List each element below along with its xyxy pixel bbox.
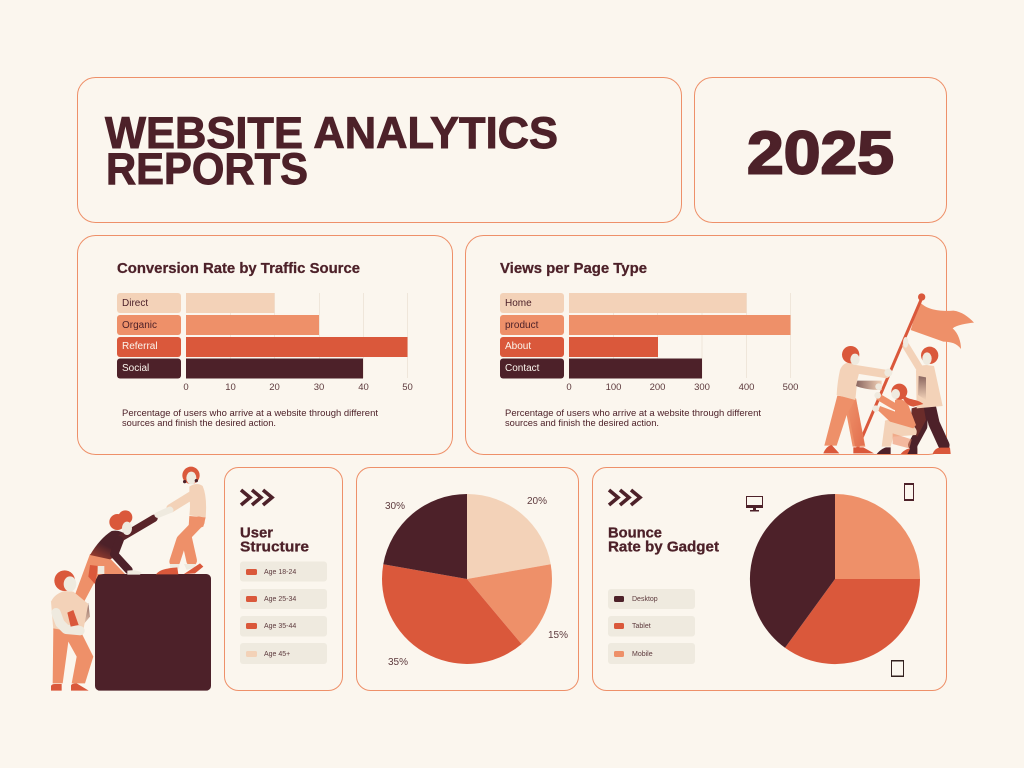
heading: bounce rate by gadget: Bounce [608, 524, 662, 542]
legend: gadgets: Mobile [632, 651, 653, 658]
legend: age groups: Age 35-44 [264, 623, 296, 630]
description: conversion rate: sources and finish the desired action. [122, 418, 276, 429]
bar chart: conversion rate: Organic [122, 320, 157, 331]
description: views per page: sources and finish the desired action. [505, 418, 659, 429]
bar chart: conversion rate: 30 [314, 382, 324, 393]
legend: age groups: Age 18-24 [264, 569, 296, 576]
panel: bounce rate by gadget [592, 468, 946, 690]
heading: user structure: User [240, 524, 273, 542]
bar chart: views per page: Contact [505, 363, 540, 374]
pie labels [385, 496, 568, 668]
bar chart: conversion rate [117, 293, 413, 393]
icon: mobile [904, 483, 914, 501]
icon: desktop [746, 496, 763, 512]
bar chart: views per page: product [505, 320, 539, 331]
bar chart: conversion rate: 0 [183, 382, 189, 393]
pie chart: age share [382, 494, 552, 664]
panel: title [78, 78, 682, 222]
legend: age groups: Age 45+ [264, 651, 290, 658]
bar chart: views per page: 100 [606, 382, 621, 393]
icon: tablet [891, 660, 904, 677]
bar chart: conversion rate: 50 [402, 382, 413, 393]
description: views per page: Percentage of users who arrive at a website through different [505, 408, 761, 419]
bar chart: views per page: 400 [739, 382, 754, 393]
heading: bounce rate by gadget [608, 524, 719, 556]
description: conversion rate: Percentage of users who arrive at a website through different [122, 408, 378, 419]
icon: chevrons [241, 490, 272, 505]
illustration: team raising a flag [823, 293, 974, 454]
legend: gadgets [608, 589, 695, 664]
panel: views per page type [466, 236, 946, 454]
bar chart: conversion rate: Social [122, 363, 149, 374]
legend: age groups [240, 562, 327, 664]
bar chart: views per page: 300 [694, 382, 710, 393]
heading: bounce rate by gadget: Rate by Gadget [608, 538, 719, 556]
illustration: team climbing a block [51, 467, 211, 691]
bar chart: conversion rate: Direct [122, 298, 148, 309]
heading: website analytics reports [105, 109, 558, 194]
bar chart: conversion rate: 10 [225, 382, 236, 393]
heading: views per page type: Views per Page Type [500, 261, 647, 277]
bar chart: views per page: About [505, 341, 531, 352]
description: conversion rate [122, 408, 378, 429]
icon: chevrons [609, 490, 640, 505]
bar chart: views per page: 0 [566, 382, 572, 393]
year 2025: 2025 [747, 120, 894, 186]
bar chart: conversion rate: 20 [269, 382, 280, 393]
pie chart: bounce rate [750, 494, 920, 664]
heading: website analytics reports: REPORTS [106, 145, 308, 194]
heading: user structure [240, 524, 309, 556]
description: views per page [505, 408, 761, 429]
bar chart: conversion rate: Referral [122, 341, 158, 352]
legend: age groups: Age 25-34 [264, 596, 296, 603]
heading: website analytics reports: WEBSITE ANALYTICS [105, 109, 558, 158]
pie labels: 30% [385, 501, 405, 512]
bar chart: views per page [500, 293, 798, 393]
bar chart: conversion rate: 40 [358, 382, 369, 393]
legend: gadgets: Desktop [632, 596, 658, 603]
bar chart: views per page: 500 [783, 382, 798, 393]
panel: user structure [224, 468, 342, 690]
legend: gadgets: Tablet [632, 623, 651, 630]
bar chart: views per page: 200 [650, 382, 665, 393]
heading: conversion rate: Conversion Rate by Traffic Source [117, 261, 360, 277]
panel: conversion rate by traffic source [78, 236, 452, 454]
panel: year [694, 78, 946, 222]
heading: user structure: Structure [240, 538, 309, 556]
panel: age pie chart [356, 468, 578, 690]
bar chart: views per page: Home [505, 298, 532, 309]
pie labels: 15% [548, 630, 568, 641]
pie labels: 35% [388, 657, 408, 668]
pie labels: 20% [527, 496, 547, 507]
